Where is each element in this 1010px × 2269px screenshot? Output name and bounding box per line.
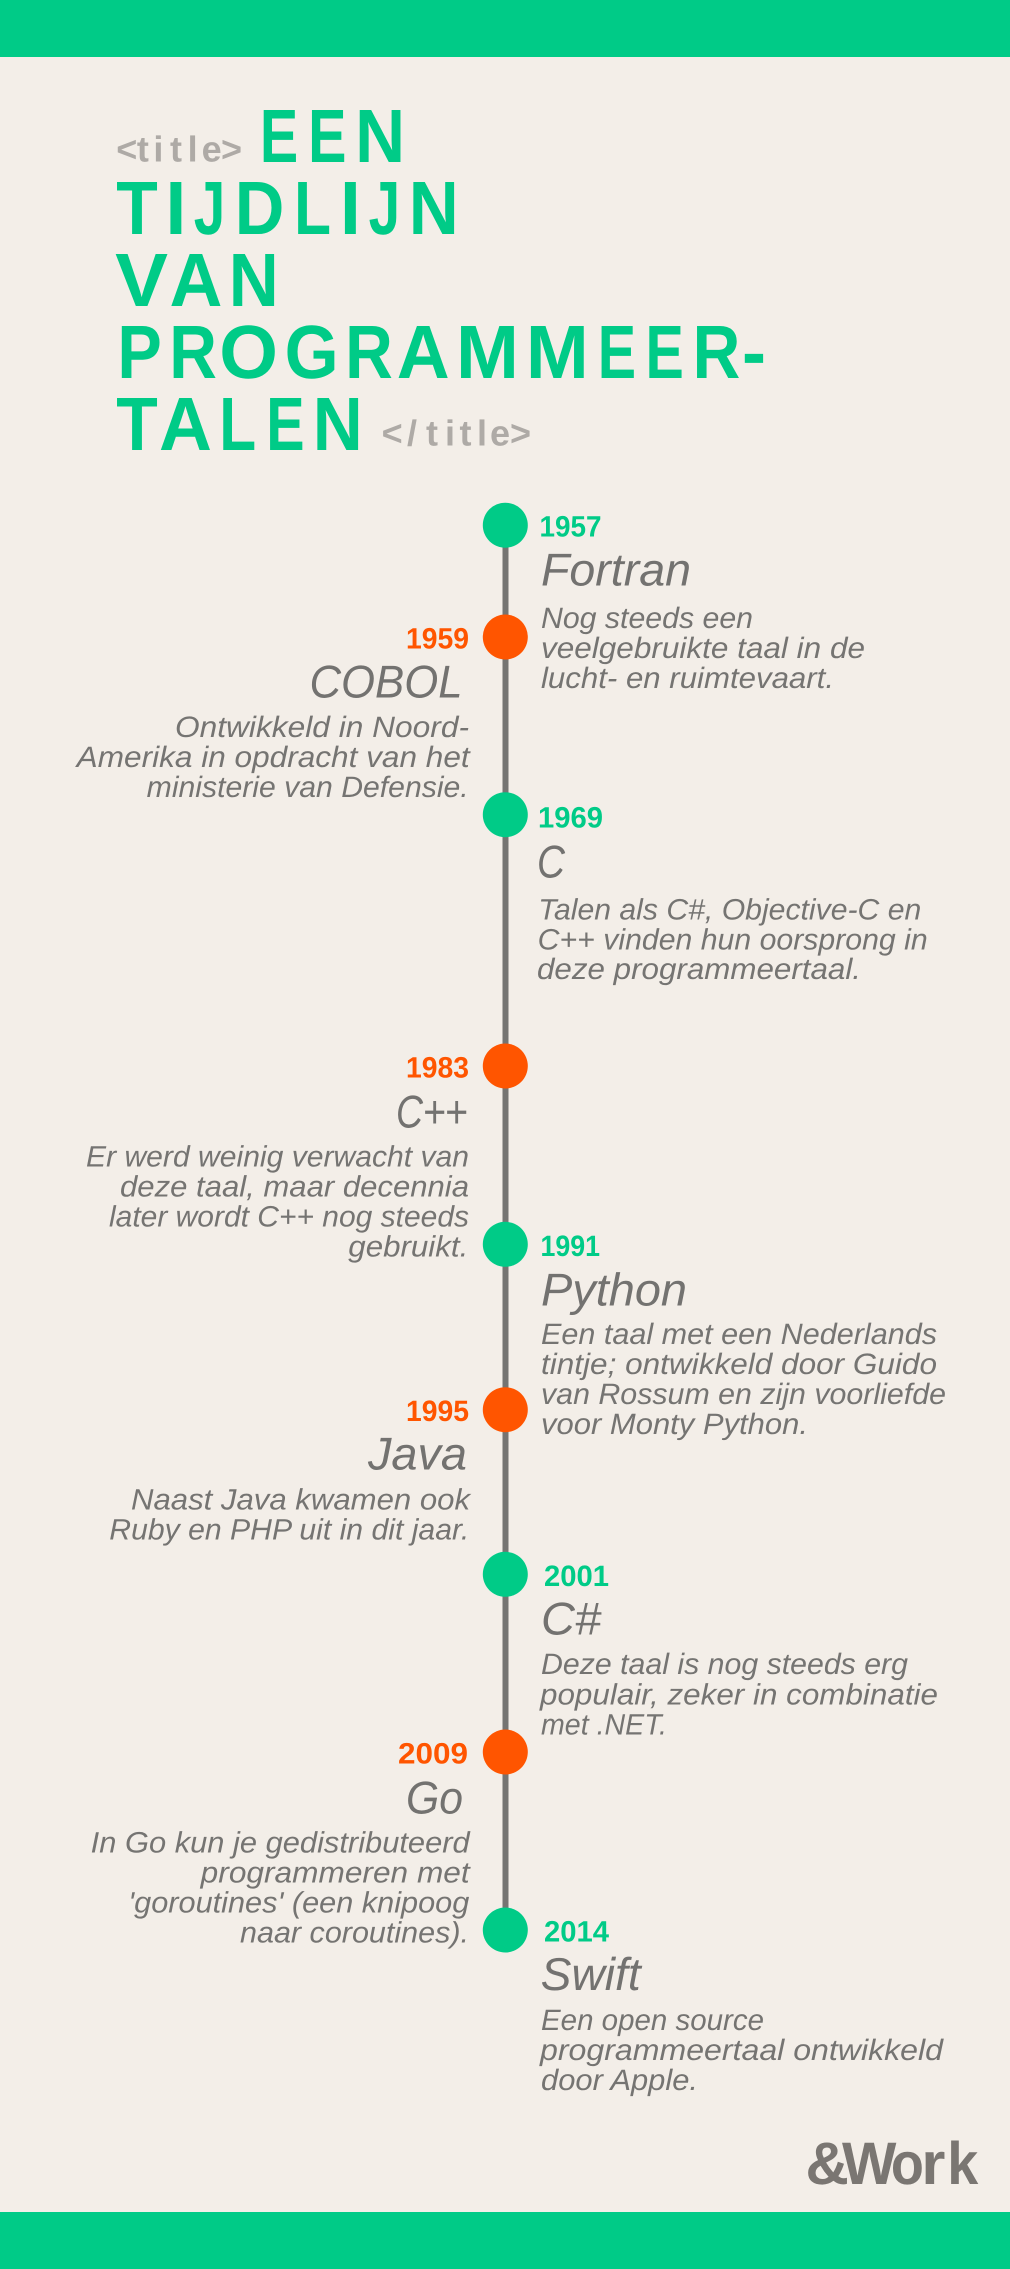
title line 4: E (598, 310, 636, 394)
description: voor Monty Python. (541, 1408, 808, 1441)
title line 3: A (170, 238, 222, 322)
title (115, 94, 766, 466)
title line 4: M (526, 310, 589, 394)
title line 1: N (355, 94, 405, 178)
title line 5: N (313, 382, 363, 466)
title line 1: E (260, 94, 298, 178)
description: deze taal, maar decennia (120, 1171, 469, 1204)
name: COBOL (310, 656, 462, 708)
title line 4: P (117, 310, 162, 394)
logo: &Work: r (921, 2130, 945, 2197)
marker (483, 1387, 528, 1432)
title line 2: D (235, 166, 284, 250)
description: deze programmeertaal. (537, 953, 861, 986)
title line 2: J (194, 166, 225, 250)
title line 2: L (294, 166, 331, 250)
name: C (537, 835, 566, 887)
title line 5: L (219, 382, 256, 466)
title line 4: R (169, 310, 217, 394)
year: 1995 (406, 1395, 469, 1428)
name: Python (541, 1264, 687, 1316)
title line 4: A (397, 310, 450, 394)
year: 2009 (398, 1737, 468, 1770)
entry: 2014 Swift (483, 1908, 945, 2097)
description: populair, zeker in combinatie (539, 1678, 938, 1711)
marker (483, 614, 528, 660)
title line 3: V (115, 238, 168, 322)
title line 4: R (693, 310, 740, 394)
description: 'goroutines' (een knipoog (128, 1887, 470, 1920)
description: programmeertaal ontwikkeld (539, 2034, 945, 2067)
logo: &Work: k (947, 2130, 979, 2197)
title line 4: O (219, 310, 278, 394)
description (541, 602, 865, 695)
title line 1: E (308, 94, 346, 178)
title line 4: R (345, 310, 393, 394)
year: 2014 (544, 1915, 610, 1948)
name: + (423, 1085, 446, 1137)
logo: &Work: o (891, 2130, 924, 2197)
entry: 1991 Python (483, 1222, 946, 1441)
description: ministerie van Defensie. (147, 771, 469, 804)
title line 4: G (285, 310, 339, 394)
name: Swift (541, 1948, 643, 2000)
description: lucht- en ruimtevaart. (541, 662, 834, 695)
description: Naast Java kwamen ook (131, 1483, 471, 1516)
marker (483, 1552, 528, 1597)
title line 2: I (165, 166, 186, 250)
description: met .NET. (541, 1708, 667, 1741)
marker (483, 792, 528, 837)
description: In Go kun je gedistributeerd (91, 1827, 471, 1860)
description (86, 1141, 469, 1264)
description (539, 2004, 945, 2097)
title line 4: E (646, 310, 684, 394)
opening title tag: <title> (116, 129, 242, 170)
title line 2: J (369, 166, 400, 250)
year: 1957 (540, 511, 602, 544)
title line 4: - (742, 310, 766, 394)
description: Amerika in opdracht van het (75, 741, 472, 774)
marker (483, 1222, 528, 1267)
title line 3: N (229, 238, 279, 322)
description (539, 1648, 938, 1741)
timeline axis (502, 525, 508, 1930)
year: 1969 (538, 802, 603, 835)
description: veelgebruikte taal in de (541, 632, 865, 665)
description: van Rossum en zijn voorliefde (541, 1378, 946, 1411)
description: door Apple. (541, 2064, 698, 2097)
description (537, 893, 928, 986)
year: 1991 (540, 1230, 600, 1263)
title line 5: A (159, 382, 212, 466)
description: Ruby en PHP uit in dit jaar. (109, 1513, 469, 1546)
name: Java (367, 1427, 467, 1479)
name: + (445, 1085, 468, 1137)
marker (483, 1730, 528, 1774)
logo: &Work: W (842, 2130, 897, 2197)
description: Ontwikkeld in Noord- (175, 711, 469, 744)
title line 4: M (456, 310, 519, 394)
description: Talen als C#, Objective-C en (538, 893, 921, 926)
description (109, 1483, 471, 1546)
description (91, 1827, 472, 1950)
title line 5: E (266, 382, 305, 466)
marker (483, 503, 528, 548)
entry: 2009 Go (91, 1730, 528, 1950)
name: Go (406, 1771, 463, 1823)
description: later wordt C++ nog steeds (109, 1201, 469, 1234)
description: gebruikt. (348, 1231, 468, 1264)
title line 2: I (340, 166, 361, 250)
description: Een open source (541, 2004, 764, 2037)
name: C# (541, 1593, 602, 1645)
entry: 1959 COBOL (75, 614, 528, 804)
bottom green bar (0, 2212, 1010, 2269)
marker (483, 1044, 528, 1088)
name: C (396, 1085, 424, 1137)
description: Deze taal is nog steeds erg (541, 1648, 909, 1681)
entry: 2001 C# (483, 1552, 938, 1741)
marker (483, 1908, 528, 1952)
description: naar coroutines). (240, 1917, 469, 1950)
description: programmeren met (200, 1857, 472, 1890)
entry: 1957 Fortran (483, 503, 865, 695)
title line 5: T (116, 382, 158, 466)
description (541, 1318, 946, 1441)
entry: 1995 Java (109, 1387, 528, 1546)
description: Een taal met een Nederlands (541, 1318, 937, 1351)
year: 1959 (406, 622, 469, 655)
entry: 1969 C (483, 792, 928, 986)
description: Nog steeds een (541, 602, 753, 635)
entry: 1983 C++ (86, 1044, 528, 1264)
description: C++ vinden hun oorsprong in (538, 923, 928, 956)
title line 2: T (116, 166, 158, 250)
logo: &Work: & (806, 2130, 849, 2197)
closing title tag: </title> (382, 413, 531, 454)
description (75, 711, 472, 804)
top green bar (0, 0, 1010, 57)
description: Er werd weinig verwacht van (86, 1141, 469, 1174)
name: Fortran (541, 544, 691, 596)
year: 1983 (406, 1051, 469, 1084)
year: 2001 (544, 1560, 609, 1593)
title line 2: N (409, 166, 459, 250)
description: tintje; ontwikkeld door Guido (541, 1348, 937, 1381)
